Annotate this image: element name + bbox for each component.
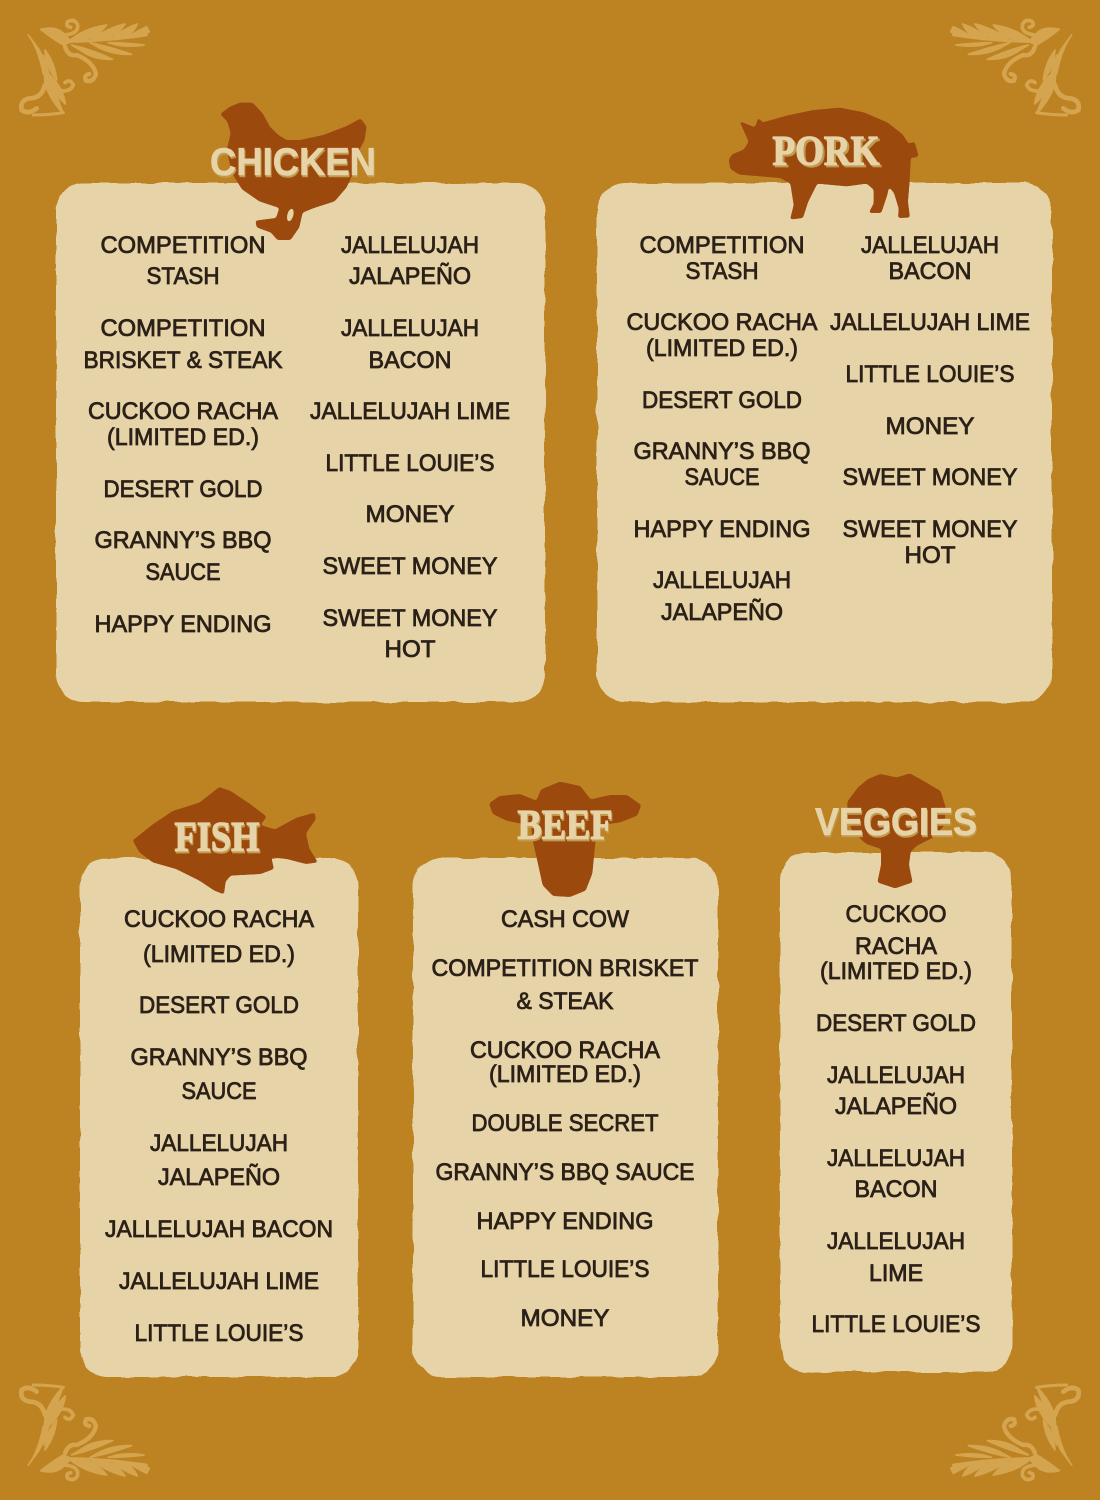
chicken list: right column: JALLELUJAH [341, 315, 479, 342]
pork list: right column: MONEY [886, 413, 974, 440]
fish list: JALLELUJAH BACON [105, 1216, 333, 1243]
chicken list: right column: JALAPEÑO [349, 263, 471, 290]
chicken card background [56, 183, 545, 702]
veggies list: CUCKOO [846, 901, 946, 928]
veggies list: (LIMITED ED.) [820, 958, 972, 985]
pork list: left column: COMPETITION [640, 232, 804, 259]
pork list: left column [626, 232, 818, 626]
beef list: (LIMITED ED.) [489, 1061, 641, 1088]
panel: chicken [56, 103, 545, 702]
pork list: left column: HAPPY ENDING [634, 516, 810, 543]
pork list: left column: (LIMITED ED.) [646, 335, 798, 362]
fish list: JALAPEÑO [158, 1164, 280, 1191]
veggies list: JALAPEÑO [835, 1093, 957, 1120]
chicken list: left column: CUCKOO RACHA [88, 398, 278, 425]
beef list: GRANNY’S BBQ SAUCE [436, 1159, 694, 1186]
pork list: right column: JALLELUJAH LIME [830, 309, 1030, 336]
chicken list: right column: LITTLE LOUIE’S [326, 450, 494, 477]
veggies list: LIME [869, 1260, 923, 1287]
fish list: SAUCE [182, 1078, 256, 1105]
beef list: MONEY [520, 1305, 610, 1332]
heading: pork: PORK [772, 129, 880, 175]
panel: fish [80, 787, 358, 1377]
heading: veggies: VEGGIES [816, 803, 978, 846]
chicken list: right column: JALLELUJAH [341, 232, 479, 259]
corner ornament: top left [21, 20, 149, 115]
chicken list: left column [84, 232, 282, 638]
heading: chicken: CHICKEN [211, 143, 377, 186]
chicken list: right column: JALLELUJAH LIME [310, 398, 510, 425]
corner ornament: top right [951, 20, 1079, 115]
panel: veggies [780, 773, 1012, 1372]
panel: beef [413, 782, 718, 1377]
chicken list: right column: MONEY [366, 501, 454, 528]
pork list: left column: SAUCE [684, 464, 760, 491]
pork list: right column: LITTLE LOUIE’S [846, 361, 1014, 388]
icon: fish silhouette [133, 787, 318, 894]
chicken list: right column [310, 232, 510, 663]
chicken list: left column: HAPPY ENDING [94, 611, 272, 638]
chicken list: left column: DESERT GOLD [104, 476, 262, 503]
heading: fish: FISH [176, 817, 260, 863]
heading: beef: BEEF [518, 805, 614, 851]
beef list: LITTLE LOUIE’S [480, 1256, 650, 1283]
chicken list: right column: SWEET MONEY [322, 605, 498, 632]
heading: veggies: VEGGIES [815, 801, 977, 844]
corner ornament: bottom right [951, 1385, 1079, 1480]
heading: chicken: CHICKEN [210, 141, 376, 184]
pork list: left column: GRANNY’S BBQ [634, 438, 810, 465]
veggies list: JALLELUJAH [827, 1145, 965, 1172]
chicken list: right column: HOT [384, 636, 436, 663]
fish list: LITTLE LOUIE’S [134, 1320, 304, 1347]
pork card background [597, 183, 1052, 702]
veggies list: RACHA [855, 933, 937, 960]
pork list: left column: JALLELUJAH [653, 567, 791, 594]
pork list: left column: JALAPEÑO [661, 599, 783, 626]
beef list [432, 906, 699, 1332]
veggies list: LITTLE LOUIE’S [812, 1311, 980, 1338]
chicken list: left column: SAUCE [146, 559, 220, 586]
corner ornament: bottom left [21, 1385, 149, 1480]
veggies list: JALLELUJAH [827, 1228, 965, 1255]
pork list: left column: CUCKOO RACHA [626, 309, 818, 336]
fish list: CUCKOO RACHA [124, 906, 314, 933]
beef card background [413, 858, 718, 1377]
fish list: JALLELUJAH [150, 1130, 288, 1157]
heading: pork: PORK [774, 131, 882, 177]
beef list: & STEAK [516, 988, 614, 1015]
beef list: CASH COW [501, 906, 629, 933]
fish list: GRANNY’S BBQ [130, 1044, 308, 1071]
pork list: left column: STASH [686, 258, 758, 285]
fish list: JALLELUJAH LIME [119, 1268, 319, 1295]
heading: beef: BEEF [518, 803, 612, 849]
chicken list: left column: COMPETITION [100, 315, 266, 342]
fish list [105, 906, 333, 1347]
chicken list: left column: BRISKET & STEAK [84, 347, 282, 374]
pork list: right column: HOT [904, 542, 956, 569]
veggies list: BACON [854, 1176, 938, 1203]
heading: fish: FISH [174, 815, 260, 861]
chicken list: left column: COMPETITION [100, 232, 266, 259]
panel: pork [597, 108, 1052, 702]
fish list: DESERT GOLD [139, 992, 299, 1019]
chicken list: left column: GRANNY’S BBQ [94, 527, 272, 554]
icon: chicken silhouette [220, 103, 367, 240]
icon: broccoli silhouette [847, 773, 946, 888]
icon: cow head silhouette [489, 782, 641, 897]
pork list: right column: JALLELUJAH [861, 232, 999, 259]
veggies list: JALLELUJAH [827, 1062, 965, 1089]
veggies card background [780, 852, 1012, 1372]
icon: pig silhouette [729, 108, 919, 220]
chicken list: left column: (LIMITED ED.) [107, 424, 259, 451]
veggies list: DESERT GOLD [816, 1010, 976, 1037]
fish list: (LIMITED ED.) [143, 941, 295, 968]
pork list: right column [830, 232, 1030, 569]
pork list: right column: SWEET MONEY [842, 516, 1018, 543]
chicken list: right column: BACON [368, 347, 452, 374]
beef list: COMPETITION BRISKET [432, 955, 699, 982]
beef list: HAPPY ENDING [476, 1208, 654, 1235]
veggies list [812, 901, 980, 1338]
pork list: left column: DESERT GOLD [642, 387, 802, 414]
pork list: right column: BACON [888, 258, 972, 285]
beef list: DOUBLE SECRET [472, 1110, 659, 1137]
chicken list: right column: SWEET MONEY [322, 553, 498, 580]
pork list: right column: SWEET MONEY [842, 464, 1018, 491]
fish card background [80, 858, 358, 1377]
chicken list: left column: STASH [146, 263, 220, 290]
beef list: CUCKOO RACHA [470, 1037, 660, 1064]
